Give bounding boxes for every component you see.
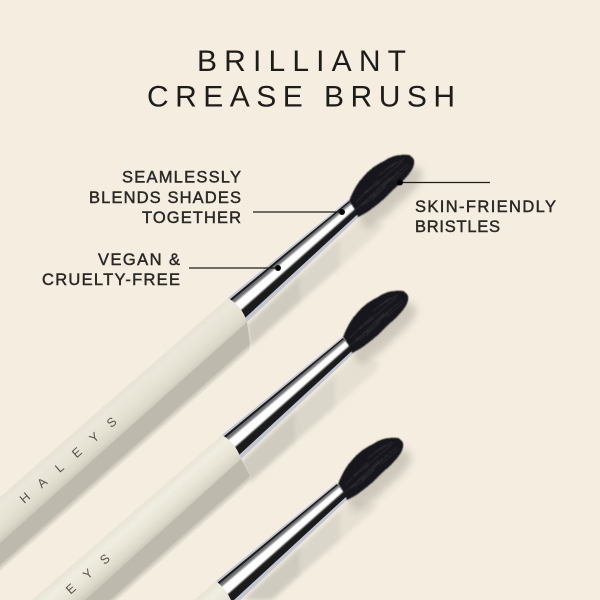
callout: vegan and cruelty-free: VEGAN & [98,251,180,269]
ferrule and bristle cast shadows [241,217,385,600]
brand mark: brush 2: EYS [63,551,113,597]
callout: seamlessly blends shades together [89,169,345,227]
brush 3 (bottom) [194,438,411,600]
callout: vegan and cruelty-free [42,251,281,289]
callout: skin-friendly bristles [397,180,556,236]
callout: vegan and cruelty-free: CRUELTY-FREE [42,271,180,289]
handle cast shadows [0,322,250,600]
callout: seamlessly blends shades together: BLENDS SHADES [89,189,241,207]
brush 1 (top) [0,155,422,543]
brush 2 (middle) [32,291,416,600]
title [147,45,455,114]
callout: seamlessly blends shades together: SEAMLESSLY [122,169,241,187]
title: BRILLIANT [197,45,406,78]
callout: skin-friendly bristles: SKIN-FRIENDLY [415,198,556,216]
title: CREASE BRUSH [147,80,455,114]
brand mark: brush 1: HALEYS [17,415,120,506]
callout: skin-friendly bristles: BRISTLES [415,218,500,236]
callout: seamlessly blends shades together: TOGETHER [142,209,241,227]
